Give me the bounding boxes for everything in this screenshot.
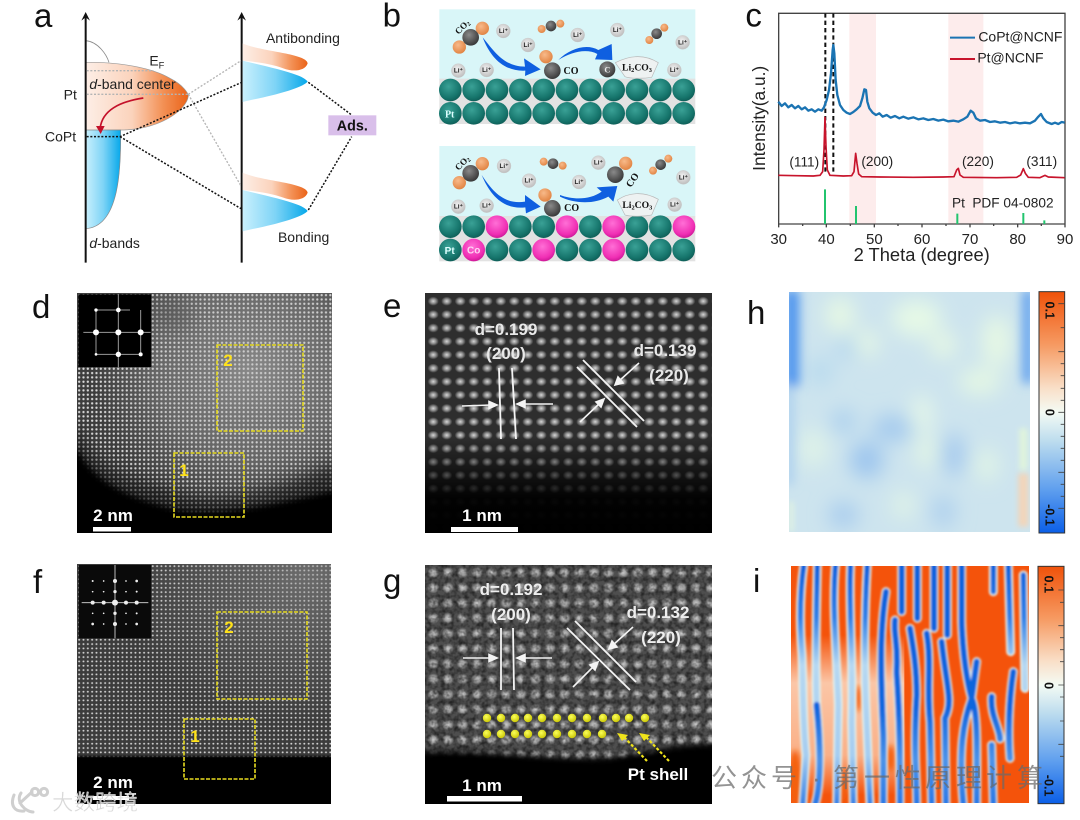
watermark: 大数跨境 with logo [12, 788, 138, 815]
scale bar 1 nm: 1 nm [462, 506, 502, 525]
lower Li+ ions: Li⁺ [500, 163, 508, 170]
upper adsorbed CO [539, 50, 579, 79]
d-spacing labels: (220) [649, 366, 689, 385]
upper Pt label: Pt [445, 109, 455, 120]
CoPt d-band lobe [86, 130, 121, 229]
panel letter f: f [33, 563, 43, 600]
lower released CO: CO [624, 171, 642, 190]
dotted connector lines [87, 61, 352, 210]
spacing lines (200) [499, 368, 516, 439]
colour bar: -0.1 [1042, 775, 1056, 797]
x tick labels [770, 231, 1073, 248]
lower Li+ ions: Li⁺ [482, 203, 491, 210]
colour bar [1038, 566, 1064, 804]
upper Pt atoms [439, 79, 695, 125]
strain heatmap [788, 563, 1030, 807]
lower CO2 molecule [453, 154, 489, 189]
scale bar 1 nm [447, 776, 522, 802]
yellow Pt shell atoms [483, 714, 649, 738]
band labels [45, 30, 340, 251]
d-spacing labels [480, 580, 689, 647]
dashed peak guides [825, 13, 833, 172]
lower Li+ ions: Li⁺ [594, 160, 603, 167]
upper carbon and Li2CO3: 2 [631, 67, 634, 74]
lower released CO [607, 157, 642, 190]
right energy axis [237, 12, 246, 263]
panel letter g: g [383, 562, 401, 599]
yellow box 2 [217, 612, 307, 699]
panel letter e: e [383, 287, 401, 324]
lower Li+ ions: Li⁺ [679, 174, 688, 181]
scale bar 1 nm: 1 nm [462, 776, 502, 795]
lattice image [425, 293, 712, 533]
arrows (220) [573, 627, 633, 687]
scale bar 2 nm: 2 nm [93, 506, 133, 525]
lower free CO2 molecules [540, 155, 672, 175]
lower Pt and Co atoms [439, 215, 695, 261]
pale lower left wash [791, 635, 904, 795]
upper Li+ ions: Li⁺ [499, 28, 508, 35]
peak labels: Pt [952, 195, 965, 210]
scale bar 1 nm [451, 506, 518, 532]
yellow box 1: 1 [179, 461, 189, 480]
arrows (220) [580, 363, 639, 422]
lower Li+ ions: Li⁺ [575, 179, 583, 186]
lower Li2CO3: Li [622, 200, 631, 211]
lower atom labels: Pt [445, 246, 455, 257]
small band cap above Fermi level [86, 41, 109, 62]
spacing lines (220) [577, 360, 644, 427]
lower Li+ ions [451, 156, 690, 214]
colour bar: 0 [1043, 409, 1057, 416]
band labels: d-band center [89, 76, 176, 92]
arrows (200) [463, 654, 552, 662]
spacing lines (220) [567, 621, 636, 690]
upper blue arrows [483, 37, 612, 76]
upper Li+ ions: Li⁺ [670, 67, 679, 74]
band labels: E [149, 53, 159, 69]
peak labels: (111) [789, 155, 819, 170]
x tick labels: 50 [866, 231, 883, 248]
lower Li+ ions: Li⁺ [525, 178, 533, 185]
colour bar: 0.1 [1043, 302, 1057, 319]
orange lumps in the pale area [788, 685, 895, 807]
yellow box 1 [174, 453, 244, 517]
d-spacing labels: d=0.192 [480, 580, 542, 599]
spacing lines (200) [501, 628, 514, 690]
colour bar: 0.1 [1042, 576, 1056, 593]
d-spacing labels [475, 320, 696, 385]
x tick labels: 30 [770, 231, 787, 248]
band labels: F [159, 60, 165, 70]
lattice image [425, 565, 712, 804]
CoPt@NCNF curve [778, 45, 1065, 124]
panel c: XRD chart [745, 0, 1073, 265]
panel d: STEM image [33, 293, 332, 533]
d-spacing labels: d=0.199 [475, 320, 537, 339]
d-spacing labels: (200) [491, 605, 531, 624]
antibonding lobes [243, 43, 308, 102]
Ads. label box: Ads. [337, 119, 368, 135]
lower CO2 molecule: CO [453, 156, 469, 172]
upper Li+ ions: Li⁺ [613, 27, 622, 34]
x tick labels: 80 [1009, 231, 1026, 248]
upper CO2 molecule [453, 18, 489, 54]
scale bar 2 nm: 2 nm [93, 773, 133, 792]
panel e: atomic resolution image [383, 287, 712, 533]
band labels: Antibonding [266, 30, 340, 46]
red shift arrow [96, 98, 143, 134]
upper CO2 molecule: 2 [466, 21, 473, 28]
yellow dashed arrows [617, 733, 669, 761]
FFT inset [78, 294, 151, 367]
upper CO2 molecule: CO [453, 20, 469, 36]
legend [950, 28, 1062, 66]
legend: CoPt@NCNF [978, 28, 1062, 44]
lower Li2CO3: 3 [649, 205, 652, 212]
watermark text: 大数跨境 [52, 791, 138, 815]
Pt shell label: Pt shell [628, 765, 688, 784]
x tick labels: 90 [1057, 231, 1073, 248]
panel a: d-band diagram [34, 0, 376, 263]
watermark logo [12, 788, 48, 812]
lower Li2CO3 [617, 194, 658, 216]
lattice image [77, 564, 331, 804]
strain heatmap [785, 290, 1033, 532]
peak labels: (311) [1026, 154, 1057, 169]
x tick labels: 60 [914, 231, 930, 248]
lower Li+ ions: Li⁺ [670, 202, 679, 209]
lattice image [77, 293, 332, 533]
upper carbon and Li2CO3: C [604, 65, 610, 74]
yellow box 1: 1 [190, 727, 200, 746]
lower Li2CO3: CO [635, 200, 650, 211]
lower scene background [439, 146, 695, 261]
FFT inset [79, 565, 151, 638]
upper Li+ ions: Li⁺ [678, 39, 687, 46]
upper Li+ ions: Li⁺ [482, 67, 491, 74]
d-spacing labels: d=0.139 [634, 341, 696, 360]
upper carbon and Li2CO3: CO [634, 62, 649, 73]
colour bar: 0 [1042, 682, 1056, 689]
upper carbon and Li2CO3: 3 [649, 67, 652, 74]
upper Li+ ions [451, 23, 690, 78]
colour bar [1039, 292, 1065, 533]
d-spacing labels: (220) [641, 628, 681, 647]
upper scene background [439, 9, 695, 124]
legend: Pt@NCNF [977, 50, 1044, 66]
arrows (200) [462, 400, 553, 408]
lower adsorbed CO [538, 188, 579, 217]
upper carbon and Li2CO3: Li [622, 62, 631, 73]
band labels: d-bands [89, 235, 140, 251]
upper free CO2 molecules [538, 20, 668, 44]
peak labels: (200) [861, 154, 893, 169]
peak labels: (220) [962, 154, 994, 169]
Pt d-band lobe [86, 62, 188, 131]
upper Li+ ions: Li⁺ [454, 68, 463, 75]
y axis title: Intensity(a.u.) [749, 66, 769, 171]
x axis title: 2 Theta (degree) [854, 244, 990, 265]
lower atom labels: Co [467, 246, 480, 257]
yellow box 1 [184, 719, 255, 779]
peak labels [789, 154, 1057, 210]
plot frame and ticks [779, 13, 1065, 227]
x tick labels: 70 [962, 231, 978, 248]
x tick labels: 40 [818, 231, 835, 248]
left energy axis [81, 12, 90, 263]
Pt@NCNF curve [778, 117, 1065, 178]
band labels: CoPt [45, 129, 76, 145]
lower Li2CO3: 2 [631, 205, 635, 212]
panel f: STEM image [33, 564, 331, 804]
panel g: atomic resolution image [383, 562, 722, 815]
colour bar: -0.1 [1043, 504, 1057, 526]
peak labels: PDF 04-0802 [972, 195, 1054, 210]
bonding lobes [243, 173, 308, 231]
highlight bands [849, 13, 983, 224]
upper adsorbed CO: CO [564, 66, 579, 77]
lower Li+ ions: Li⁺ [454, 204, 463, 211]
panel h: strain map [747, 290, 1065, 533]
d-spacing labels: (200) [486, 344, 526, 363]
lower blue arrows [482, 175, 617, 213]
yellow box 2: 2 [224, 618, 234, 637]
band labels: Bonding [278, 229, 329, 245]
panel letter h: h [747, 294, 765, 331]
watermark: 公众号 第一性原理计算: 公众号·第一性原理计算 [711, 763, 1043, 793]
panel i: strain map [753, 562, 1064, 807]
upper Li+ ions: Li⁺ [524, 42, 532, 49]
d-spacing labels: d=0.132 [627, 603, 689, 622]
upper carbon and Li2CO3 [599, 57, 658, 78]
panel letter d: d [32, 288, 50, 325]
upper Li+ ions: Li⁺ [573, 32, 582, 39]
yellow box 2 [217, 345, 303, 431]
panel letter i: i [753, 562, 760, 599]
Pt reference sticks [825, 189, 1044, 224]
lower CO2 molecule: 2 [466, 157, 473, 164]
lower adsorbed CO: CO [564, 203, 579, 214]
band labels: Pt [64, 87, 77, 103]
yellow box 2: 2 [223, 351, 233, 370]
Ads. label box [328, 115, 376, 135]
panel b: reaction schematics [383, 0, 695, 261]
lower atom labels [445, 246, 480, 257]
